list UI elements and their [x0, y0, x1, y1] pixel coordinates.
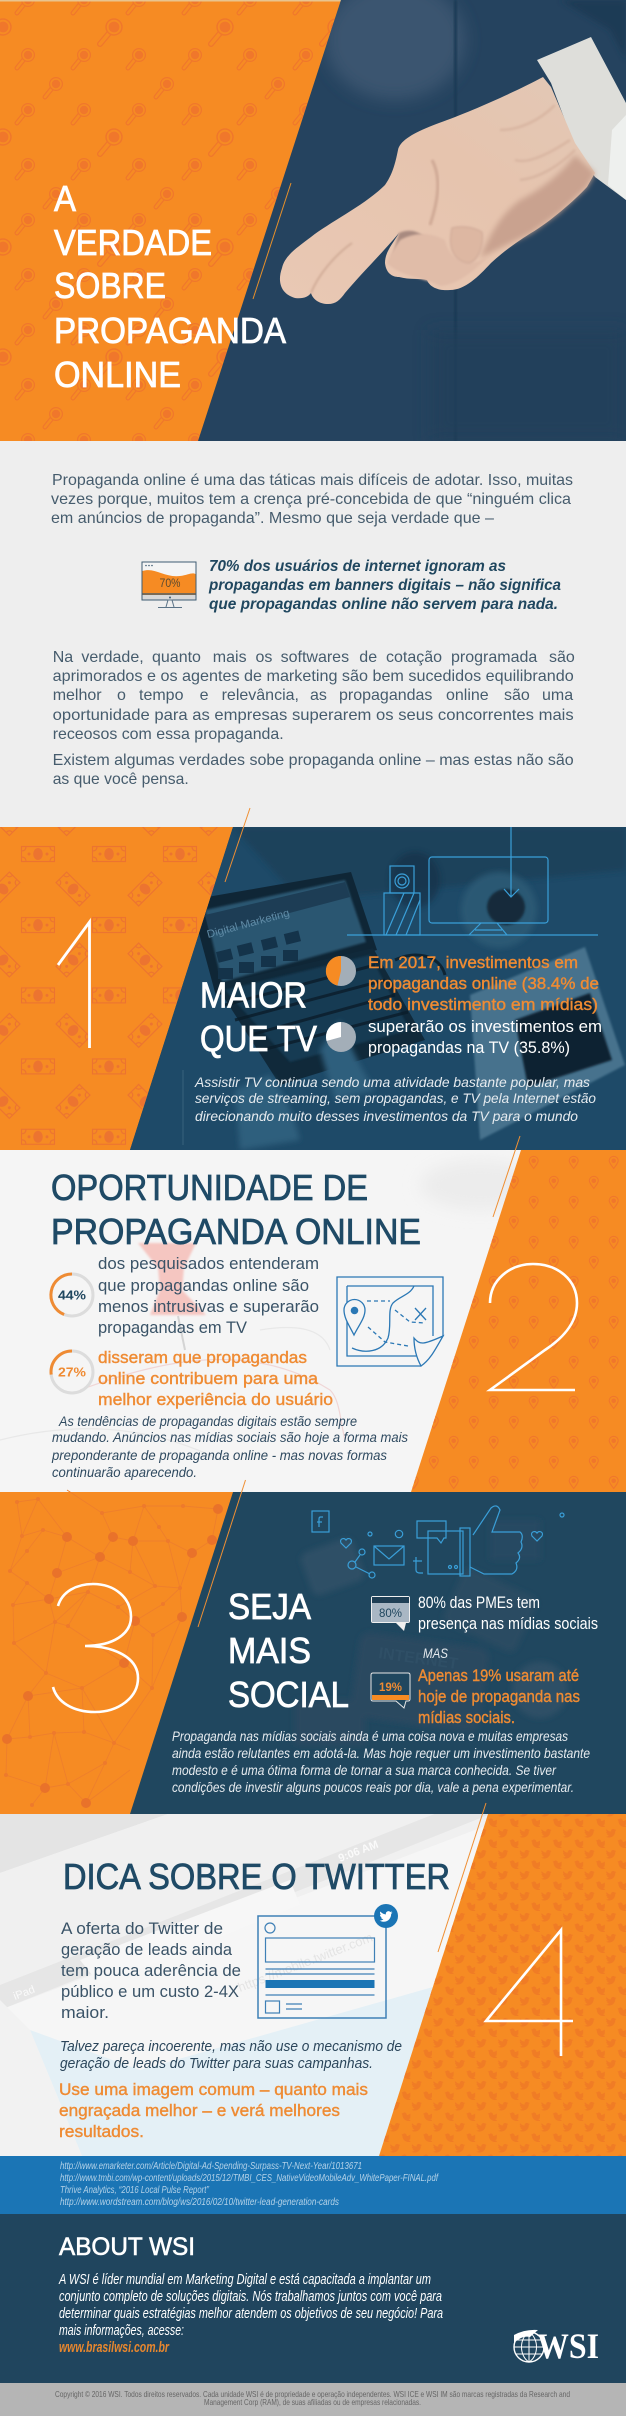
panel: section 4: [0, 1800, 626, 2156]
text: 44%: propagandas em TV: [98, 1318, 248, 1337]
text: twitter offer: geração de leads ainda: [61, 1940, 233, 1959]
body paragraph: online: [446, 687, 489, 704]
body paragraph: tempo: [139, 687, 184, 704]
icon: monitor 70%: 70%: [160, 578, 180, 590]
italic note: geração de leads do Twitter para suas campanhas.: [60, 2055, 373, 2072]
italic note: modesto e é uma ótima forma de tornar a sua marca conhecida. Se tiver: [172, 1762, 557, 1778]
panel: sources: [0, 2156, 626, 2214]
body paragraph: [53, 649, 575, 788]
text: twitter offer: A oferta do Twitter de: [61, 1919, 223, 1938]
pattern: network: [2, 1490, 223, 1808]
text: 80%: 80% das PMEs tem: [418, 1593, 540, 1612]
about text: conjunto completo de soluções digitais. Nós trabalhamos juntos com você para: [59, 2289, 442, 2305]
stat text: superarão os investimentos em: [368, 1017, 602, 1036]
text: 80%: presença nas mídias sociais: [418, 1614, 598, 1633]
text: 44%: que propagandas online são: [98, 1276, 309, 1295]
faint photo: ipad screen: 9:06 AM: [337, 1839, 380, 1865]
italic note: direcionando muito desses investimentos da TV para o mundo: [195, 1108, 578, 1124]
italic note: mudando. Anúncios nas mídias sociais são hoje a forma mais: [52, 1429, 408, 1445]
faint photo: ipad screen: https://mobile.twitter.com: [236, 1930, 375, 1995]
text: 19%: [418, 1666, 580, 1727]
numeral 3: [53, 1584, 138, 1712]
orange tip: Use uma imagem comum – quanto mais: [59, 2080, 368, 2099]
italic note: [194, 1074, 596, 1124]
heading: seja mais social: SOCIAL: [228, 1674, 349, 1715]
bubble: 80%: [371, 1596, 410, 1631]
numeral 1: [58, 922, 90, 1048]
logo: wsi: WSI: [537, 2326, 599, 2366]
title: [54, 178, 286, 395]
title: PROPAGANDA: [54, 310, 286, 351]
orange tip: engraçada melhor – e verá melhores: [59, 2101, 340, 2120]
bubble: 19%: [371, 1673, 410, 1708]
italic note: continuarão aparecendo.: [52, 1464, 197, 1480]
accent lines: [198, 808, 520, 1952]
ring: 27%: [51, 1351, 93, 1393]
italic note: serviços de streaming, sem propagandas, e TV pela Internet estão: [195, 1090, 596, 1106]
text: 27%: melhor experiência do usuário: [98, 1390, 333, 1409]
callout text: 70% dos usuários de internet ignoram as: [209, 558, 506, 575]
about text: determinar quais estratégias melhor atendem os objetivos de seu negócio! Para: [59, 2306, 443, 2322]
heading: seja mais social: MAIS: [228, 1630, 311, 1671]
stat text: Em 2017, investimentos em: [368, 953, 578, 972]
text: 27%: disseram que propagandas: [98, 1348, 307, 1367]
body paragraph: relevância,: [222, 687, 299, 704]
italic note: preponderante de propaganda online - mas novas formas: [51, 1447, 387, 1463]
text: 27%: [98, 1348, 333, 1409]
text: 44%: [98, 1254, 319, 1337]
body paragraph: softwares: [281, 649, 349, 666]
bubble: 19%: 19%: [379, 1680, 402, 1694]
heading: maior que tv: QUE TV: [200, 1018, 317, 1059]
website link: www.brasilwsi.com.br: [59, 2340, 170, 2356]
italic note: [51, 1413, 408, 1480]
panel: section 1: [0, 827, 626, 1150]
title: A: [54, 178, 76, 219]
label: mas: MAS: [423, 1645, 449, 1661]
accent line: [253, 183, 291, 299]
panel: about wsi: [0, 2214, 626, 2383]
heading: maior que tv: [200, 974, 317, 1059]
stat text: [368, 953, 602, 1057]
text: twitter offer: público e um custo 2-4X: [61, 1982, 239, 2001]
numeral 2: [490, 1264, 577, 1390]
stat text: propagandas na TV (35.8%): [368, 1038, 570, 1057]
source links: [60, 2161, 439, 2208]
source links: Thrive Analytics, “2016 Local Pulse Report”: [60, 2185, 210, 2196]
icon: monitor 70%: [142, 562, 196, 608]
body paragraph: Existem algumas verdades sobe propaganda online – mas estas não são: [53, 752, 574, 769]
text: twitter offer: [61, 1919, 241, 2022]
body paragraph: uma: [542, 687, 573, 704]
faint photo: social objects: [295, 1520, 568, 1745]
numeral 4: [486, 1930, 573, 2056]
faint photo: ipad screen: [0, 1800, 488, 2156]
stat text: todo investimento em mídias): [368, 995, 598, 1014]
text: 44%: menos intrusivas e superarão: [98, 1297, 319, 1316]
text: 19%: hoje de propaganda nas: [418, 1687, 580, 1706]
heading: seja mais social: SEJA: [228, 1586, 311, 1627]
title: ONLINE: [54, 354, 181, 395]
copyright text: [55, 2389, 570, 2407]
faint photo: push pin and map: [0, 1160, 540, 1460]
source links: http://www.tmbi.com/wp-content/uploads/2015/12/TMBI_CES_NativeVideoMobileAdv_WhitePaper-FINAL.pdf: [60, 2173, 439, 2184]
body paragraph: verdade,: [81, 649, 144, 666]
pie: tv 35.8%: [326, 1022, 356, 1052]
heading: dica sobre o twitter: DICA SOBRE O TWITTER: [63, 1856, 450, 1897]
text: 19%: Apenas 19% usaram até: [418, 1666, 579, 1685]
ring: 44%: 44%: [58, 1288, 86, 1302]
italic note: Talvez pareça incoerente, mas não use o mecanismo de: [60, 2038, 402, 2055]
callout text: que propagandas online não servem para nada.: [209, 596, 558, 613]
body paragraph: o: [117, 687, 126, 704]
title: SOBRE: [54, 265, 166, 306]
body paragraph: de: [359, 649, 377, 666]
panel: section 2: [0, 1150, 626, 1492]
panel: hero: [0, 0, 626, 441]
body paragraph: receosos com essa propaganda.: [53, 726, 284, 743]
icon: social thumbs up: [312, 1506, 564, 1578]
body paragraph: cotação: [386, 649, 442, 666]
body paragraph: melhor: [53, 687, 102, 704]
body paragraph: são: [549, 649, 575, 666]
body paragraph: as que você pensa.: [53, 771, 189, 788]
pie: online 38.4%: [326, 956, 356, 986]
body paragraph: as: [310, 687, 327, 704]
body paragraph: propagandas: [339, 687, 432, 704]
orange tip: [59, 2080, 368, 2141]
icon: tv and speaker: [347, 827, 598, 935]
intro paragraph: [51, 472, 573, 527]
about text: mais informações, acesse:: [59, 2323, 184, 2339]
title: VERDADE: [54, 222, 212, 263]
text: twitter offer: tem pouca aderência de: [61, 1961, 241, 1980]
text: 44%: dos pesquisados entenderam: [98, 1254, 319, 1273]
body paragraph: quanto: [152, 649, 201, 666]
heading: oportunidade: OPORTUNIDADE DE: [51, 1167, 368, 1208]
italic note: Assistir TV continua sendo uma atividade bastante popular, mas: [194, 1074, 590, 1090]
source links: http://www.emarketer.com/Article/Digital-Ad-Spending-Surpass-TV-Next-Year/1013671: [60, 2161, 362, 2172]
heading: seja mais social: [228, 1586, 349, 1715]
faint photo: social objects: INTERNET: [377, 1645, 459, 1673]
heading: oportunidade: PROPAGANDA ONLINE: [51, 1211, 421, 1252]
body paragraph: os: [256, 649, 272, 666]
body paragraph: oportunidade para as empresas superarem os seus concorrentes mais: [53, 707, 574, 724]
about text: [58, 2272, 443, 2339]
panel: section 3: [0, 1490, 626, 1814]
stat text: propagandas online (38.4% de: [368, 974, 599, 993]
body paragraph: aprimorados e os agentes de marketing são bem sucedidos equilibrando: [53, 668, 574, 685]
intro paragraph: em anúncios de propaganda”. Mesmo que seja verdade que –: [51, 510, 494, 527]
ring: 27%: 27%: [58, 1364, 86, 1380]
copyright text: Management Corp (RAM), de suas afiliadas ou de empresas relacionadas.: [204, 2397, 421, 2407]
intro paragraph: vezes porque, muitos tem a crença pré-concebida de que “ninguém clica: [51, 491, 571, 508]
italic note: As tendências de propagandas digitais estão sempre: [58, 1413, 357, 1429]
text: 19%: mídias sociais.: [418, 1708, 515, 1727]
text: twitter offer: maior.: [61, 2003, 109, 2022]
logo: wsi: [514, 2326, 599, 2366]
body paragraph: são: [504, 687, 530, 704]
faint photo: ipad screen: iPad: [12, 1984, 37, 2003]
photo: laptop on desk: Digital Marketing: [206, 907, 291, 941]
source links: http://www.wordstream.com/blog/ws/2016/02/10/twitter-lead-generation-cards: [60, 2197, 339, 2208]
icon: map: [337, 1277, 443, 1366]
heading: oportunidade: [51, 1167, 421, 1252]
heading: about wsi: ABOUT WSI: [59, 2233, 195, 2261]
text: 27%: online contribuem para uma: [98, 1369, 319, 1388]
italic note: [60, 2038, 402, 2072]
about text: A WSI é líder mundial em Marketing Digital e está capacitada a implantar um: [58, 2272, 431, 2288]
ring: 44%: [51, 1274, 93, 1316]
body paragraph: e: [200, 687, 209, 704]
intro paragraph: Propaganda online é uma das táticas mais difíceis de adotar. Isso, muitas: [52, 472, 573, 489]
body paragraph: Na: [53, 649, 73, 666]
panel: intro: [0, 441, 626, 827]
orange tip: resultados.: [59, 2122, 144, 2141]
callout text: propagandas em banners digitais – não significa: [208, 577, 561, 594]
bubble: 80%: 80%: [379, 1606, 402, 1620]
body paragraph: programada: [451, 649, 537, 666]
text: 80%: [418, 1593, 598, 1633]
heading: maior que tv: MAIOR: [200, 974, 307, 1016]
photo: laptop on desk: [120, 827, 626, 1150]
body paragraph: mais: [213, 649, 247, 666]
hero photo: crossed fingers: [190, 0, 626, 441]
panel: copyright: [0, 2383, 626, 2416]
callout text: [208, 558, 561, 613]
italic note: [172, 1728, 590, 1795]
icon: twitter card: [258, 1904, 398, 2018]
